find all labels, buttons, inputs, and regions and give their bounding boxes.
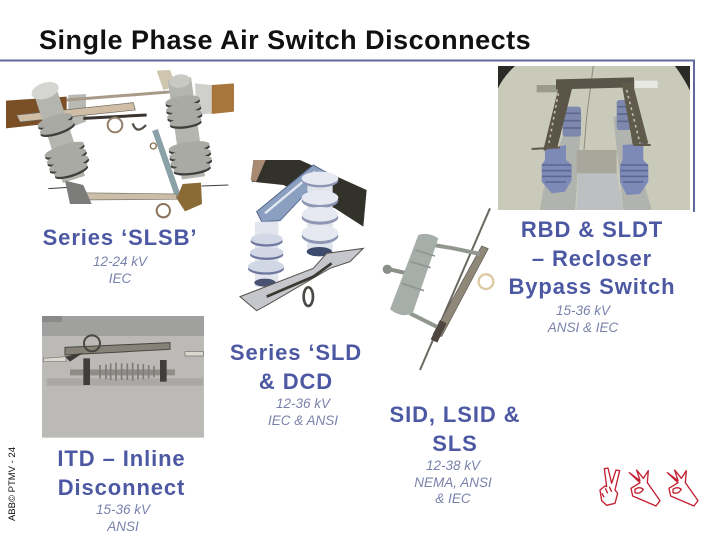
title: Single Phase Air Switch Disconnects xyxy=(39,25,531,55)
heading: RBD and SLDT: RBD & SLDT xyxy=(521,217,663,242)
heading: SID, LSID and SLS xyxy=(390,402,520,456)
title frame rule xyxy=(0,60,694,212)
photo: Series SLSB switch xyxy=(6,70,234,217)
spec: SID, LSID and SLS xyxy=(414,458,492,506)
hand sign B xyxy=(629,470,660,506)
heading: RBD and SLDT xyxy=(508,217,675,299)
spec: SID, LSID and SLS: NEMA, ANSI xyxy=(414,474,492,490)
left insulator xyxy=(23,77,94,186)
photo: Series SLD and DCD switch xyxy=(240,160,367,311)
hand sign B second xyxy=(667,470,698,506)
heading: ITD inline disconnect: ITD – Inline xyxy=(57,446,186,471)
heading: Series SLD and DCD: Series ‘SLD xyxy=(230,340,362,365)
heading: SID, LSID and SLS: SLS xyxy=(432,431,478,456)
logo: ABB hand signs xyxy=(600,468,698,506)
heading: Series SLD and DCD xyxy=(230,340,362,394)
spec: RBD and SLDT: ANSI & IEC xyxy=(548,320,618,334)
spec: Series SLSB: 12-24 kV xyxy=(93,254,147,269)
right insulator xyxy=(158,72,214,181)
spec: RBD and SLDT xyxy=(547,303,618,334)
heading: Series SLSB: Series ‘SLSB’ xyxy=(43,225,197,250)
photo: SID, LSID and SLS switch xyxy=(383,208,493,370)
heading: SID, LSID and SLS: SID, LSID & xyxy=(390,402,520,427)
photo: ITD inline disconnect xyxy=(42,316,204,438)
heading: ITD inline disconnect: Disconnect xyxy=(58,475,185,500)
heading: RBD and SLDT: – Recloser xyxy=(532,246,652,271)
spec: ITD inline disconnect: ANSI xyxy=(107,518,139,534)
heading: Series SLD and DCD: & DCD xyxy=(259,369,333,394)
heading: RBD and SLDT: Bypass Switch xyxy=(508,274,675,299)
photo: RBD and SLDT bypass switch xyxy=(498,66,690,210)
spec: SID, LSID and SLS: 12-38 kV xyxy=(426,458,480,473)
spec: RBD and SLDT: 15-36 kV xyxy=(556,303,610,318)
spec: ITD inline disconnect: 15-36 kV xyxy=(96,502,150,517)
spec: Series SLD and DCD xyxy=(268,396,338,428)
spec: SID, LSID and SLS: & IEC xyxy=(435,491,471,506)
spec: Series SLD and DCD: 12-36 kV xyxy=(276,396,330,411)
spec: Series SLSB: IEC xyxy=(109,270,131,286)
spec: Series SLSB xyxy=(93,254,148,286)
heading: ITD inline disconnect xyxy=(57,446,186,500)
spec: ITD inline disconnect xyxy=(96,502,151,534)
hand sign A xyxy=(600,468,620,505)
footer: rotated page label: ABB© PTMV - 24 xyxy=(7,447,18,521)
spec: Series SLD and DCD: IEC & ANSI xyxy=(268,412,338,428)
